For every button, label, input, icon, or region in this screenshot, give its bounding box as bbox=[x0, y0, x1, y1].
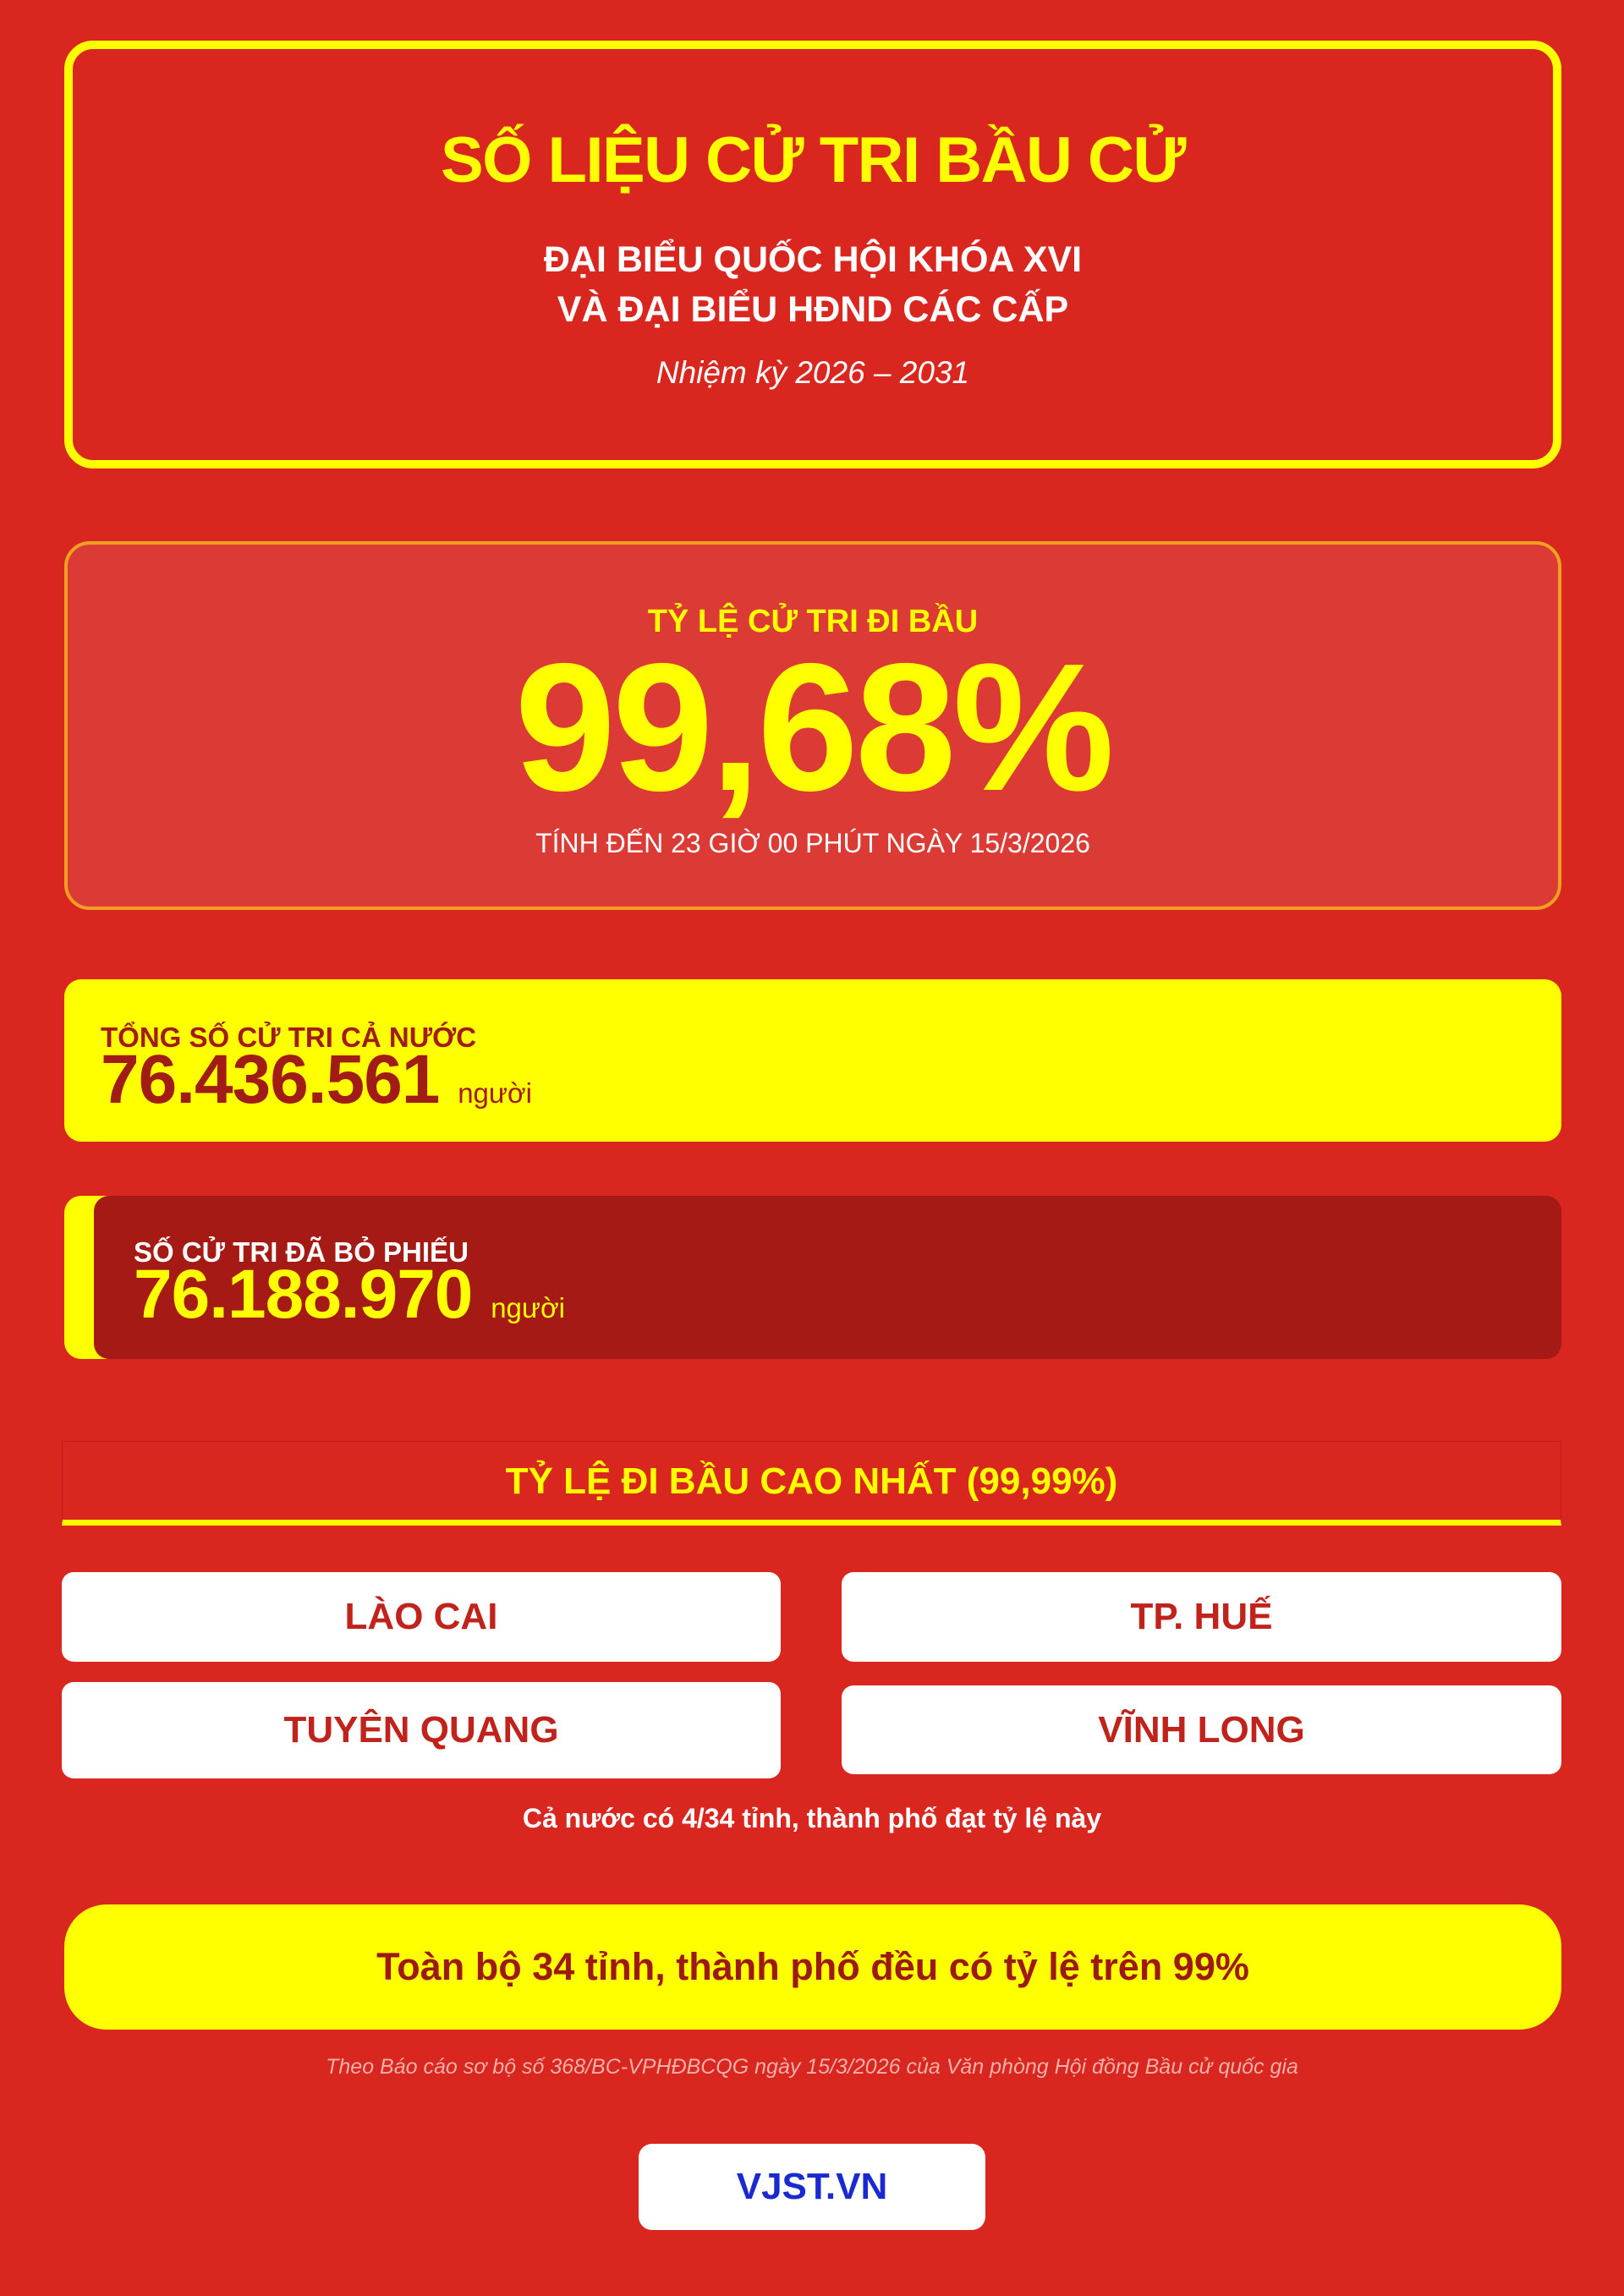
subtitle: ĐẠI BIỂU QUỐC HỘI KHÓA XVI bbox=[544, 239, 1082, 280]
note: Cả nước có 4/34 tỉnh, thành phố đạt tỷ lệ này bbox=[523, 1803, 1101, 1833]
timestamp: TÍNH ĐẾN 23 GIỜ 00 PHÚT NGÀY 15/3/2026 bbox=[535, 828, 1090, 858]
big number: 99,68% bbox=[514, 625, 1111, 829]
number: 76.436.561 người bbox=[101, 1041, 532, 1118]
title: SỐ LIỆU CỬ TRI BẦU CỬ bbox=[441, 124, 1185, 196]
panel: turnout rate bbox=[64, 541, 1561, 910]
card: Vinh Long: VĨNH LONG bbox=[1098, 1708, 1305, 1751]
card: Lao Cai: LÀO CAI bbox=[345, 1596, 497, 1637]
subtitle bbox=[544, 238, 1082, 330]
label: SỐ CỬ TRI ĐÃ BỎ PHIẾU bbox=[134, 1236, 469, 1268]
card: Tuyen Quang bbox=[62, 1682, 781, 1778]
panel: header bbox=[64, 41, 1561, 469]
number: 76.188.970 người bbox=[134, 1256, 565, 1333]
label: TỶ LỆ CỬ TRI ĐI BẦU bbox=[648, 604, 978, 639]
logo: VJST.VN bbox=[639, 2144, 985, 2230]
subtitle: VÀ ĐẠI BIỂU HĐND CÁC CẤP bbox=[557, 289, 1068, 330]
heading: highest turnout: TỶ LỆ ĐI BẦU CAO NHẤT (99,99%) bbox=[506, 1460, 1117, 1502]
card: Lao Cai bbox=[62, 1572, 781, 1662]
label: TỔNG SỐ CỬ TRI CẢ NƯỚC bbox=[101, 1022, 476, 1053]
heading: highest turnout bbox=[62, 1441, 1561, 1526]
source: Theo Báo cáo sơ bộ số 368/BC-VPHĐBCQG ngày 15/3/2026 của Văn phòng Hội đồng Bầu cử quốc gia bbox=[326, 2055, 1298, 2079]
logo: VJST.VN: VJST.VN bbox=[737, 2166, 887, 2207]
callout: all above 99%: Toàn bộ 34 tỉnh, thành phố đều có tỷ lệ trên 99% bbox=[376, 1945, 1249, 1988]
card: Tuyen Quang: TUYÊN QUANG bbox=[283, 1709, 559, 1751]
callout: all above 99% bbox=[64, 1904, 1561, 2030]
card: Hue: TP. HUẾ bbox=[1131, 1596, 1272, 1637]
term: Nhiệm kỳ 2026 – 2031 bbox=[656, 355, 969, 390]
card: Hue bbox=[842, 1572, 1561, 1662]
card: Vinh Long bbox=[842, 1685, 1561, 1774]
panel: total voters bbox=[64, 979, 1561, 1142]
panel: voted bbox=[64, 1196, 1561, 1359]
